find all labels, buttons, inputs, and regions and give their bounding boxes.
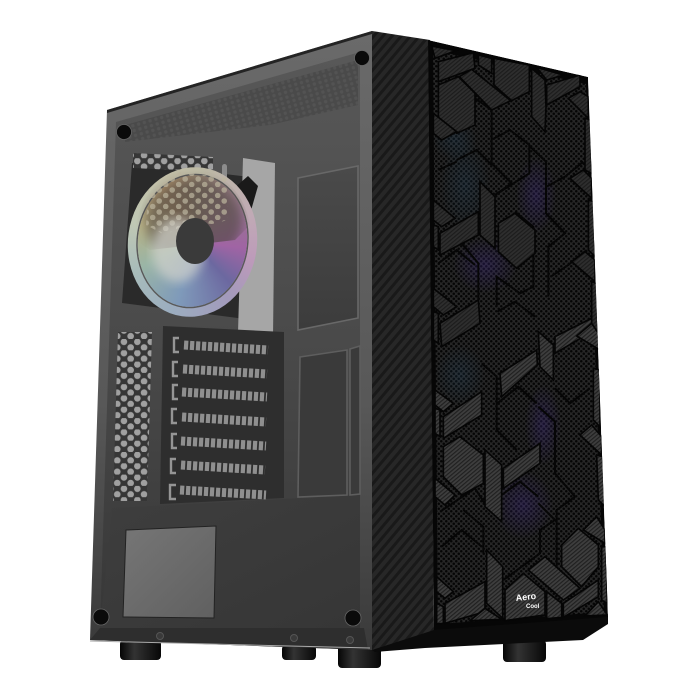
fan top honeycomb shade <box>146 180 242 264</box>
fan with RGB ring <box>128 167 258 317</box>
carbon side strip <box>372 31 434 650</box>
mesh area <box>433 50 604 624</box>
panel: front mesh <box>428 40 608 630</box>
interior lower shroud <box>100 495 360 628</box>
upper carbon panels <box>432 46 598 347</box>
fan honeycomb <box>146 172 228 235</box>
expansion slot vents <box>180 345 268 495</box>
feet <box>120 640 546 668</box>
top dark edge <box>107 31 372 113</box>
purple glow <box>440 132 558 532</box>
top mesh band <box>125 60 358 142</box>
illustration: PC tower case <box>90 31 608 668</box>
interior back plate <box>100 52 360 628</box>
power supply window <box>123 526 216 618</box>
right drive bay lower <box>298 346 360 497</box>
expansion slot backplate <box>160 326 284 504</box>
panel: glass side window <box>90 31 372 650</box>
top honeycomb vent <box>133 153 213 172</box>
small slot <box>222 164 227 184</box>
bottom rail <box>90 628 370 650</box>
logo: Aerocool: Aero <box>515 591 537 603</box>
fan inner glow <box>152 218 204 282</box>
mesh hex outlines <box>438 98 587 317</box>
fan hub <box>176 218 214 264</box>
lower carbon panels <box>435 318 607 624</box>
screws <box>93 50 370 626</box>
logo: Aerocool <box>515 591 540 610</box>
fan backing frame <box>122 163 258 320</box>
logo: Aerocool: Cool <box>526 604 540 610</box>
bracket clips <box>170 338 179 499</box>
left honeycomb vent <box>113 332 152 501</box>
bottom base <box>372 616 608 652</box>
fan blade corners <box>232 176 258 228</box>
vertical light strip <box>238 158 275 337</box>
lower mesh outlines <box>440 363 590 580</box>
right drive bay upper <box>298 166 358 330</box>
fan conic ring <box>120 160 265 325</box>
